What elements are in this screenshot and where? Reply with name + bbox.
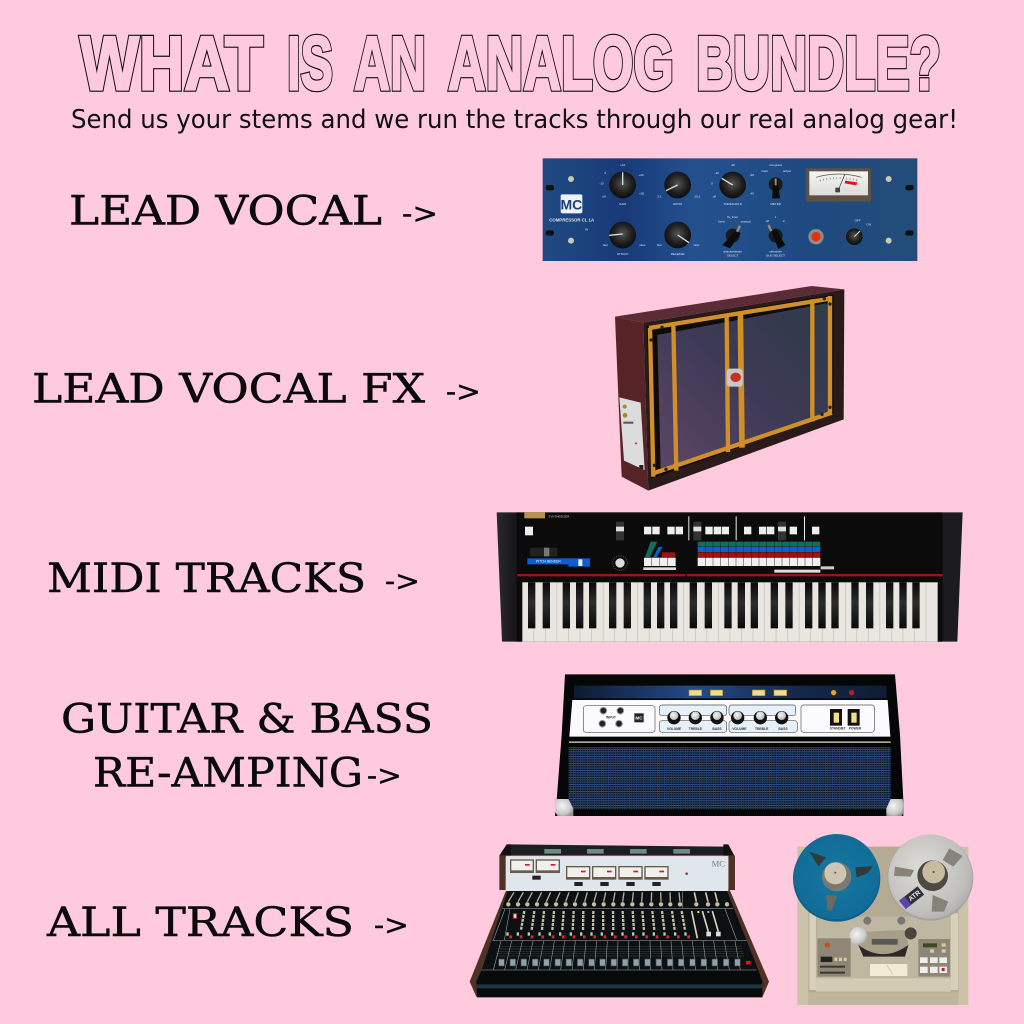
compressor small labels: manual [741,220,751,224]
console brown cheeks [470,856,769,997]
amp jacks [599,707,624,727]
amp small labels: POWER [849,727,862,731]
compressor small labels: 20:1 [694,194,701,198]
label: all tracks: ALL TRACKS [46,900,354,946]
amp small labels [606,715,862,731]
compressor small labels: sidechain [769,250,782,254]
pitch bender: PITCH BENDER [536,560,561,564]
compressor small labels: fast [657,243,662,247]
amp corners [555,799,904,816]
compressor screws [546,176,914,244]
console VU meters [510,859,688,886]
amp knobs [667,711,788,724]
tape VU window [870,964,907,976]
compressor small labels: input [761,169,768,173]
tape left control panel [817,938,851,977]
red strip [517,574,943,576]
console meter bridge [506,857,728,891]
label: guitar and bass re-amping: GUITAR & BASS [61,696,433,742]
plate surface [657,303,830,468]
pitch bender [525,527,590,567]
console front [476,970,762,997]
compressor small labels: 3:1 [657,194,662,198]
title: WHAT [80,22,263,106]
label: lead vocal: -> [402,197,438,230]
amp chrome strip [569,741,891,743]
amp top bar [574,686,887,698]
title: IS [287,22,333,106]
tape blue reel [793,834,880,922]
compressor small labels: slow [639,243,646,247]
transducer [727,369,743,387]
icon: blue compressor rack unit [543,158,917,261]
compressor small labels: output [783,169,791,173]
icon: synthesizer keyboard [497,512,963,642]
console red LEDs [509,935,690,938]
compressor toggles [722,177,785,249]
gold frame [649,296,832,477]
amp white control panel [569,700,890,737]
console grid lines [482,892,757,970]
console green and white buttons [506,932,687,936]
synth wood badge [524,512,545,518]
compressor small labels: ATTACK [617,252,628,256]
amp small labels: VOLUME [732,727,747,731]
label: lead vocal fx: LEAD VOCAL FX [32,367,426,413]
synth coloured selector rows [643,542,834,573]
icon: blue compressor rack unit: IN [585,227,588,231]
amp small labels: BASS [778,727,788,731]
amp small labels: STANDBY [830,727,846,731]
label: guitar and bass re-amping: RE-AMPING [93,751,363,797]
amp logo [634,713,644,722]
compressor small labels: fast [603,243,608,247]
amp grille [569,747,891,809]
black keys [528,582,920,628]
compressor small labels [600,163,871,258]
tape brand sticker: ATR [907,889,922,903]
compressor small labels: fixed [718,220,725,224]
icon: reel-to-reel tape machine [793,834,973,1005]
console master buttons [513,911,721,936]
compressor small labels: -10 [715,171,719,175]
title: IS [287,22,333,106]
title: ANALOG [448,22,674,106]
compressor small labels: GAIN [619,202,626,206]
amp small labels: INPUT [606,715,616,719]
label: midi tracks: -> [385,564,420,598]
console master faders [692,911,718,938]
compressor small labels: RATIO [673,202,683,206]
compressor small labels: -30 [750,173,754,177]
icon: guitar amplifier [555,674,904,816]
tape silver reel [887,835,973,921]
console upper knobs [506,902,729,906]
compressor small labels: +10 [620,163,626,167]
compressor small labels: RELEASE [671,252,685,256]
compressor small labels: OFF [855,218,861,222]
title [80,22,941,106]
compressor small labels: -10 [600,182,604,186]
compressor VU meter [806,168,871,202]
amp yellow buttons [689,690,787,696]
label: guitar and bass re-amping: -> [367,759,402,792]
control panel [619,397,645,470]
compressor small labels: BUS SELECT [766,254,785,258]
frame screws [649,297,832,471]
console red master button [746,961,751,964]
compressor small labels: +20 [638,173,644,177]
compressor small labels: 0 [711,182,713,186]
compressor small labels: -40 [750,192,754,196]
console windows [544,849,690,854]
console fader tracks [496,947,744,956]
synth top white buttons [644,516,819,540]
compressor small labels: off [602,194,606,198]
amp switches [830,709,860,726]
title: AN [354,22,426,106]
compressor red lamp [808,229,824,244]
label: guitar and bass re-amping [61,696,433,797]
compressor knobs [609,172,863,248]
compressor small labels: +30 [639,192,645,196]
compressor small labels: ON [866,222,871,226]
icon: plate reverb [615,286,844,491]
subtitle: Send us your stems and we run the tracks through our real analog gear! [71,105,958,135]
amp channel outlines [583,705,874,732]
console fader caps [499,959,740,966]
compressor small labels: SELECT [727,254,739,258]
icon: mixing console [470,844,769,997]
compressor small labels: off [766,219,769,223]
tape right control panel [918,939,950,977]
label: midi tracks: MIDI TRACKS [47,556,366,602]
compressor small labels: 1 [774,215,776,219]
compressor logo: MC [560,196,582,212]
amp logo: MC [635,716,643,721]
compressor small labels: compress [769,163,783,167]
compressor small labels: off [713,194,716,198]
console upper sliders [508,892,680,902]
console logo: MC [712,859,725,869]
tape lower cabinet [808,978,958,1005]
label: lead vocal fx: -> [446,375,481,408]
tape side rails [809,913,958,990]
compressor name: COMPRESSOR CL 1A [549,217,595,222]
amp small labels: TREBLE [689,727,703,731]
console deck [482,891,758,970]
compressor small labels: METER [770,202,782,206]
tape head assembly [849,917,917,957]
amp small labels: TREBLE [755,727,769,731]
amp small labels: VOLUME [667,727,682,731]
label: all tracks: -> [374,908,409,942]
compressor small labels: slow [693,243,700,247]
synth sliders and dial [613,522,786,570]
console mid channel faders [521,911,685,930]
white keys [522,582,938,642]
compressor small labels: fix_linen [727,215,738,219]
amp LEDs [831,690,854,695]
compressor small labels: -20 [731,163,735,167]
compressor small labels: 0 [604,171,606,175]
console master strip sliders [694,892,717,902]
compressor small labels: attack/release [723,250,742,254]
compressor small labels: THRESHOLD [723,202,743,206]
title: ANALOG [448,22,674,106]
synth name: SYNTHESIZER [548,514,570,518]
compressor small labels: 2 [783,219,785,223]
label: lead vocal: LEAD VOCAL [69,188,382,234]
title: AN [354,22,426,106]
title: WHAT [80,22,263,106]
amp small labels: BASS [712,727,722,731]
